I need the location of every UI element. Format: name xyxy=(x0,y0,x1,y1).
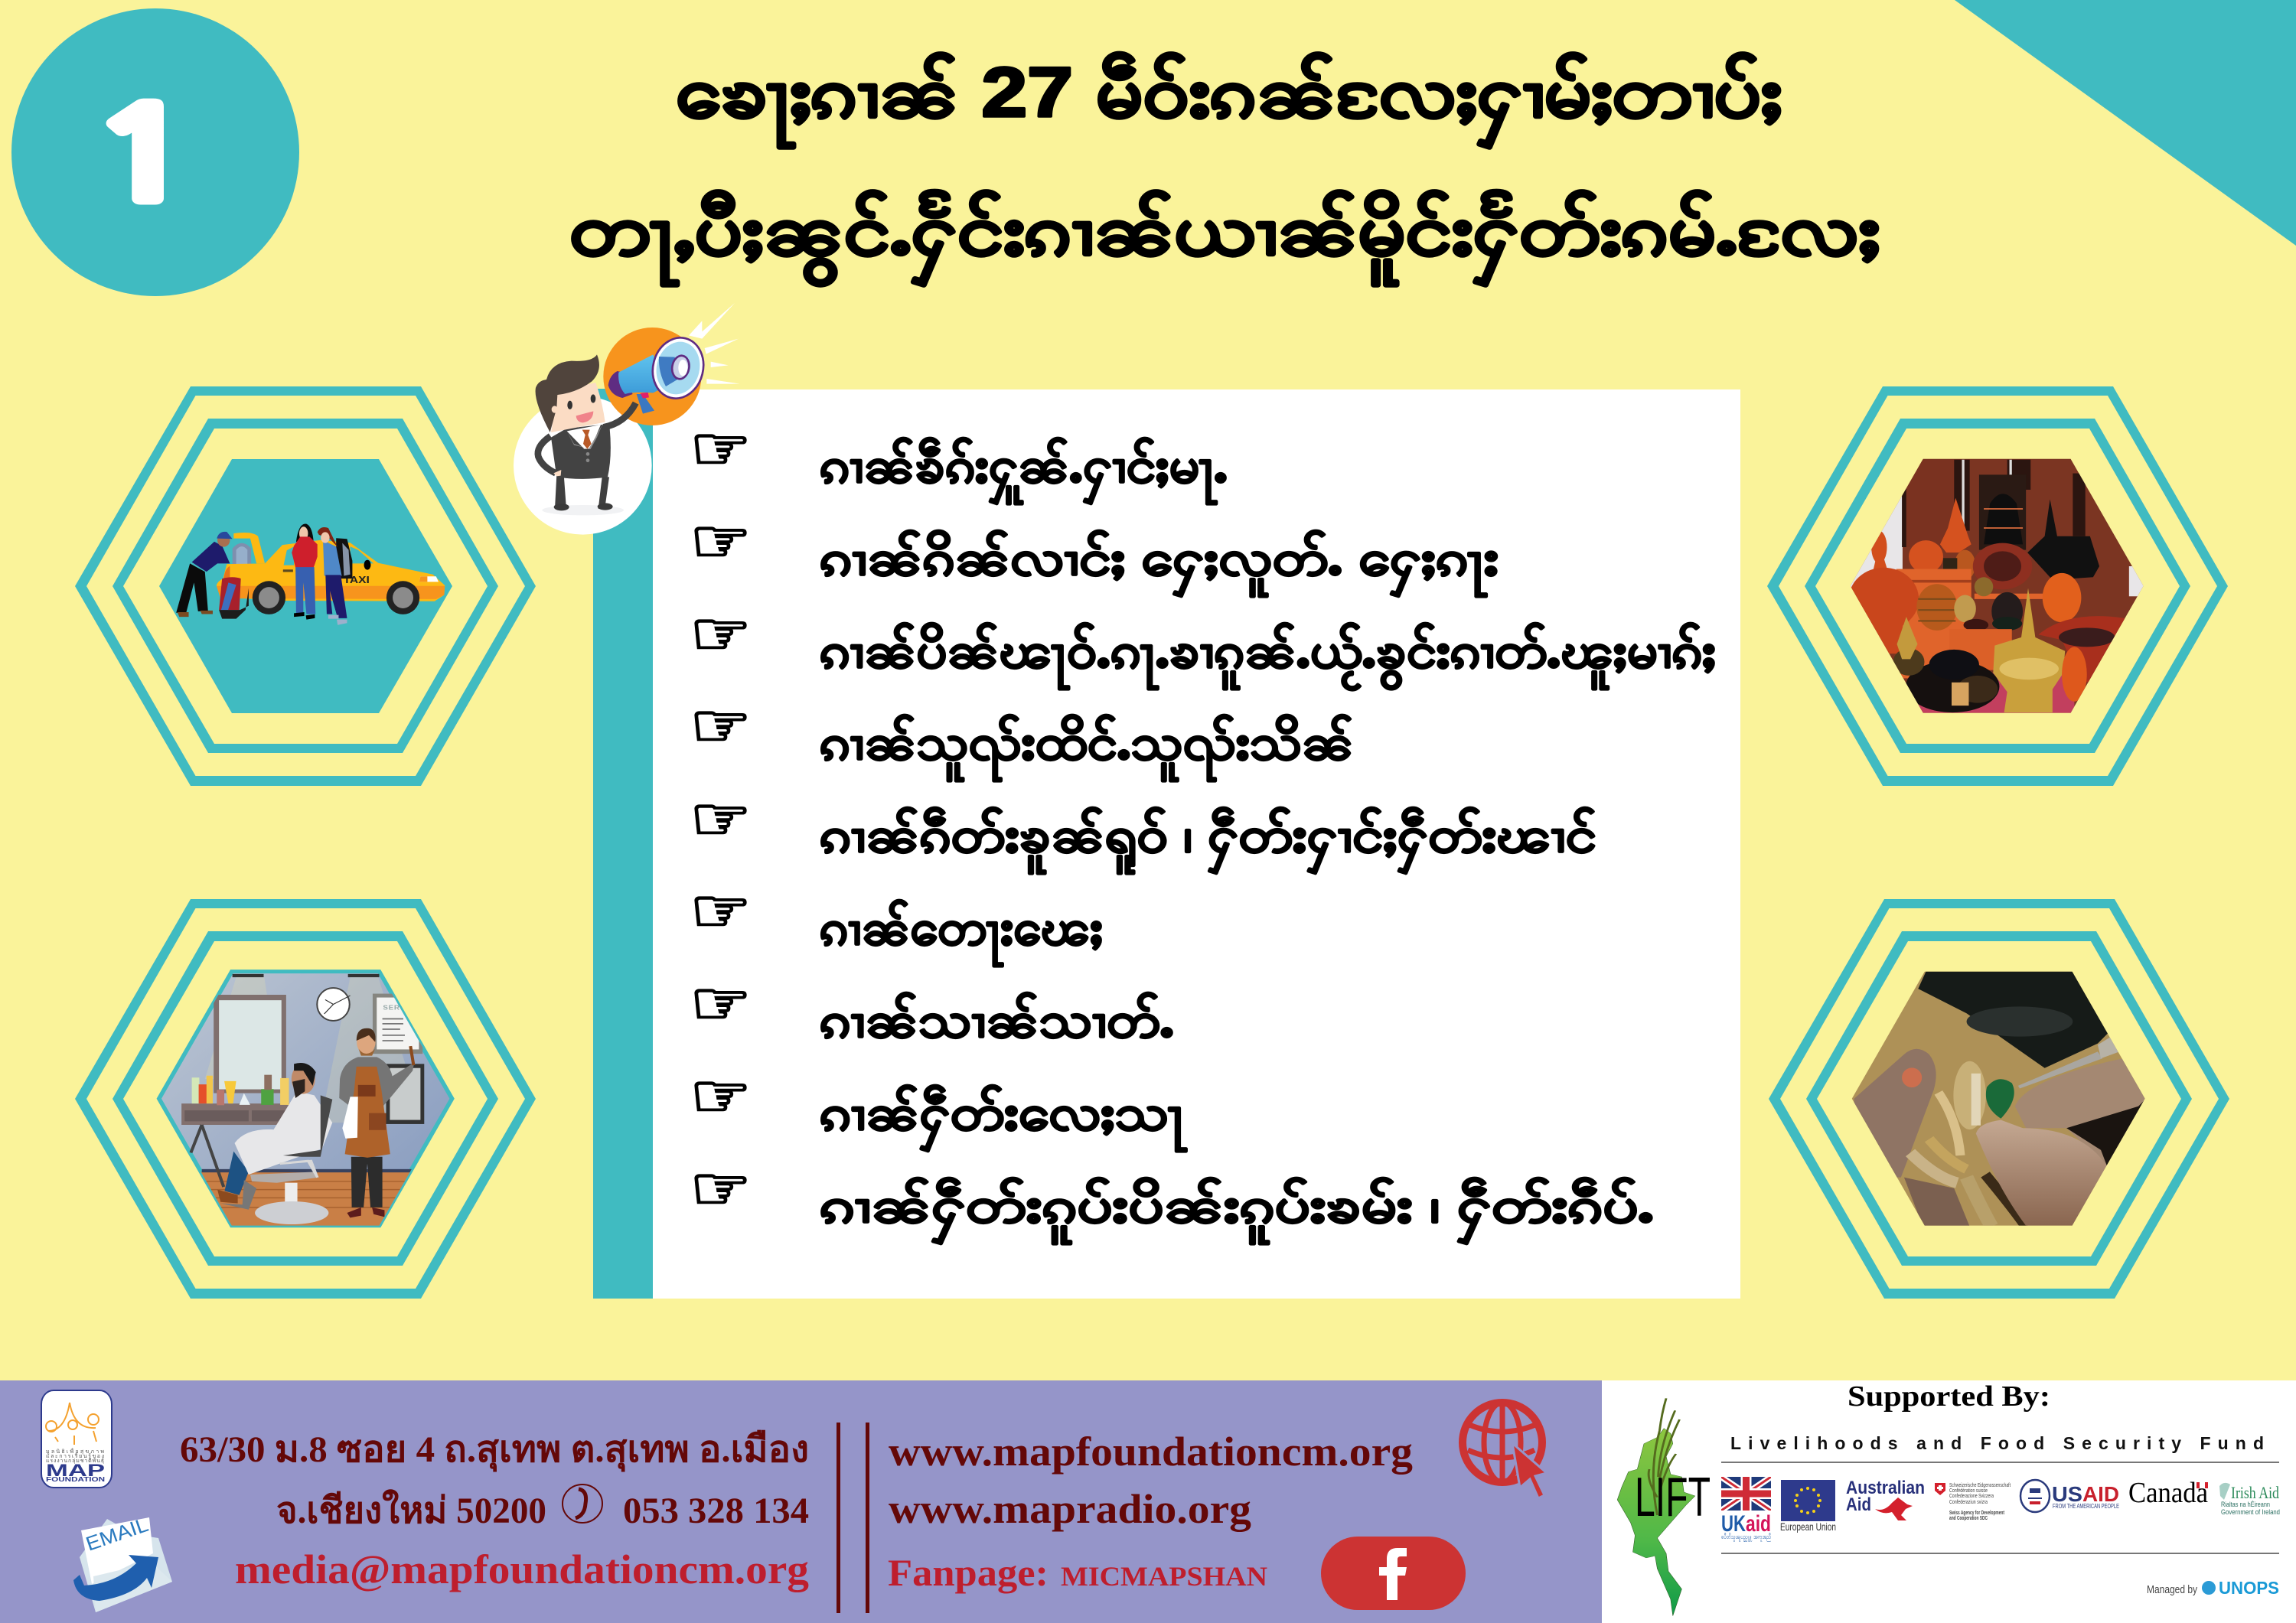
list item 5: ☞ xyxy=(690,785,752,854)
barber illustration xyxy=(155,972,468,1227)
corner triangle xyxy=(1955,0,2296,246)
list item 7 xyxy=(690,970,1174,1048)
Swiss agency logo: Confederaziun svizra xyxy=(1949,1500,1988,1505)
list item 8 xyxy=(690,1062,1187,1152)
MAP Foundation logo: FOUNDATION xyxy=(46,1476,105,1483)
icon: phone xyxy=(563,1484,602,1523)
fund name: Livelihoods and Food Security Fund xyxy=(1730,1433,2264,1453)
title: တႃႇပီႈၼွင်ႉႁႅင်းၵၢၼ်ယၢၼ်မိူင်းႁႅတ်းၵမ်ႉလႄႈ xyxy=(569,191,1880,287)
MAP Foundation logo xyxy=(41,1390,112,1488)
Canada logo: Canada xyxy=(2128,1477,2208,1509)
LIFT logo: LIFT xyxy=(1635,1467,1711,1528)
list item 9: ☞ xyxy=(690,1155,752,1224)
MAP Foundation logo: แรงงานกลุ่มชาติพันธุ์ xyxy=(46,1458,104,1464)
list item 5 xyxy=(690,785,1596,875)
icon: globe with cursor xyxy=(1463,1403,1547,1498)
fanpage: MICMAPSHAN xyxy=(1061,1561,1267,1592)
fanpage: Fanpage: xyxy=(888,1551,1049,1594)
UK aid logo xyxy=(1721,1477,1771,1542)
hexagon frame: jewellery xyxy=(1769,899,2229,1299)
list item 6: ၵၢၼ်တေႃးၽေႈ xyxy=(820,899,1103,966)
Swiss agency logo: Confédération suisse xyxy=(1949,1488,1988,1494)
Swiss agency logo: Swiss Agency for Development xyxy=(1949,1511,2004,1516)
UK aid logo: UK xyxy=(1721,1511,1746,1537)
list item 2: ၵၢၼ်ၵိၼ်လၢင်ႈ ႁေႈလူတ်ႉ ႁေႈၵႃး xyxy=(820,530,1499,598)
Australian Aid logo xyxy=(1846,1478,1925,1520)
list item 3 xyxy=(690,600,1716,690)
USAID logo: FROM THE AMERICAN PEOPLE xyxy=(2053,1503,2119,1510)
list item 3: ☞ xyxy=(690,600,752,669)
Irish Aid logo xyxy=(2219,1483,2280,1516)
UK aid logo: aid xyxy=(1746,1511,1771,1537)
jewellery photo xyxy=(1848,970,2148,1229)
supporters heading: Supported By: xyxy=(1848,1380,2050,1413)
barber illustration: SERV xyxy=(383,1004,406,1012)
Swiss agency logo: and Cooperation SDC xyxy=(1949,1516,1988,1521)
list item 7: ☞ xyxy=(690,970,752,1038)
Irish Aid logo: Irish Aid xyxy=(2231,1483,2279,1502)
MAP Foundation logo: MAP xyxy=(46,1461,105,1480)
title xyxy=(569,54,1880,287)
Australian Aid logo: Australian xyxy=(1846,1478,1925,1498)
hexagon frame: taxi xyxy=(75,386,536,786)
Managed by UNOPS xyxy=(2147,1578,2279,1598)
address xyxy=(180,1429,809,1531)
hexagon frame: lacquerware xyxy=(1767,386,2228,786)
websites xyxy=(889,1429,1413,1532)
address: 63/30 ม.8 ซอย 4 ถ.สุเทพ ต.สุเทพ อ.เมือง xyxy=(180,1429,809,1472)
Swiss agency logo: Confederazione Svizzera xyxy=(1949,1494,1994,1499)
Managed by UNOPS: Managed by xyxy=(2147,1583,2197,1596)
rules xyxy=(1721,1462,2279,1554)
European Union logo: European Union xyxy=(1780,1520,1836,1533)
UK aid logo: ၿပီတိသွၽျပည္သူ႔ အကူအညီ xyxy=(1721,1533,1771,1542)
address: จ.เชียงใหม่ 50200 xyxy=(276,1488,546,1531)
hexagon frame: barber xyxy=(75,899,536,1299)
list item 1: ၵၢၼ်ၶဵၵ်းႁူၼ်ႉႁၢင်ႈမႃႉ xyxy=(820,437,1228,505)
websites: www.mapradio.org xyxy=(889,1486,1251,1532)
Irish Aid logo: Rialtas na hÉireann xyxy=(2221,1501,2270,1508)
MAP Foundation logo: และการเรียนรู้ของ xyxy=(46,1453,104,1459)
icon: man with megaphone xyxy=(514,303,740,535)
number badge: 1 xyxy=(90,93,198,219)
list item 2 xyxy=(690,507,1499,598)
list item 5: ၵၢၼ်ၵဵတ်းၶူၼ်ရူဝ် ၊ ႁဵတ်းႁၢင်ႈႁဵတ်းၽၢင် xyxy=(820,807,1596,875)
LIFT logo xyxy=(1617,1398,1711,1616)
list item 6 xyxy=(690,877,1103,966)
divider lines xyxy=(837,1423,869,1613)
email address: media@mapfoundationcm.org xyxy=(235,1546,809,1592)
European Union logo xyxy=(1780,1480,1836,1533)
list item 8: ☞ xyxy=(690,1062,752,1131)
USAID logo xyxy=(2020,1480,2119,1512)
Irish Aid logo: Government of Ireland xyxy=(2221,1508,2280,1516)
icon: facebook xyxy=(1321,1537,1466,1610)
list item 1 xyxy=(690,415,1228,505)
websites: www.mapfoundationcm.org xyxy=(889,1429,1413,1475)
list item 8: ၵၢၼ်ႁဵတ်းလေႈသႃ xyxy=(820,1084,1187,1152)
panel teal bar xyxy=(593,389,654,1299)
list item 4: ၵၢၼ်သူၺ်းထိင်ႉသူၺ်းသိၼ် xyxy=(820,714,1354,781)
lacquerware photo xyxy=(1846,457,2148,716)
taxi illustration: TAXI xyxy=(344,575,370,585)
address: 053 328 134 xyxy=(623,1491,809,1531)
MAP Foundation logo: มูลนิธิเพื่อสุขภาพ xyxy=(46,1448,104,1455)
list item 4: ☞ xyxy=(690,692,752,761)
list item 4 xyxy=(690,692,1354,781)
title: ၶေႃႈၵၢၼ် 27 မဵဝ်းၵၼ်လႄႈႁၢမ်ႈတၢပ်ႈ xyxy=(676,54,1782,149)
Swiss agency logo xyxy=(1935,1483,2011,1521)
USAID logo: US xyxy=(2052,1482,2082,1506)
list item 9: ၵၢၼ်ႁဵတ်းၵူပ်းပိၼ်းၵူပ်းၶမ်း ၊ ႁဵတ်းၵဵပ်ႉ xyxy=(820,1177,1654,1245)
number badge xyxy=(11,8,299,296)
panel: occupations list xyxy=(593,389,1740,1299)
Swiss agency logo: Schweizerische Eidgenossenschaft xyxy=(1949,1483,2011,1488)
list item 1: ☞ xyxy=(690,415,752,484)
list item 2: ☞ xyxy=(690,507,752,576)
footer contact band xyxy=(0,1380,1602,1623)
panel white card xyxy=(653,389,1740,1299)
list item 3: ၵၢၼ်ပိၼ်ၽႃဝ်ႉၵႃႉၶၢၵူၼ်ႉယႂ်ႉၶွင်းၵၢတ်ႉၽူႈမၢၵ်ႈ xyxy=(820,622,1716,690)
list item 9 xyxy=(690,1155,1654,1245)
taxi illustration xyxy=(176,524,445,625)
Australian Aid logo: Aid xyxy=(1846,1494,1871,1515)
USAID logo: AID xyxy=(2082,1482,2119,1506)
email icon xyxy=(73,1513,172,1612)
list item 6: ☞ xyxy=(690,877,752,946)
fanpage xyxy=(888,1551,1267,1594)
list item 7: ၵၢၼ်သၢၼ်သၢတ်ႉ xyxy=(820,992,1174,1048)
email icon: EMAIL xyxy=(83,1513,151,1556)
supporters panel xyxy=(1602,1380,2296,1623)
Managed by UNOPS: UNOPS xyxy=(2219,1578,2279,1598)
